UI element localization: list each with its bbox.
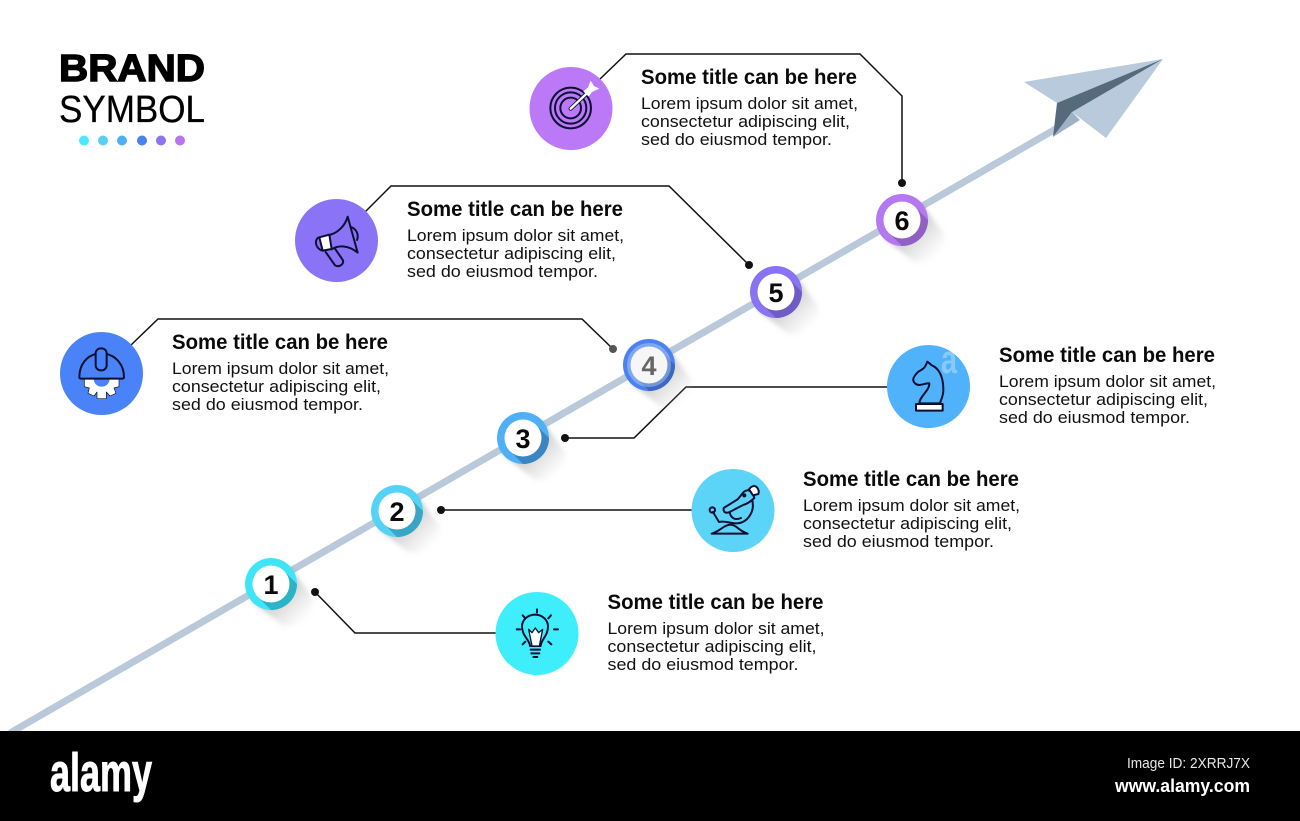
text block: step 4: consectetur adipiscing elit, (172, 378, 381, 396)
text block: step 4 (172, 331, 389, 414)
text block: step 1: Lorem ipsum dolor sit amet, (608, 620, 824, 638)
connector: step 4 (131, 319, 617, 353)
text block: step 5: sed do eiusmod tempor. (407, 263, 598, 281)
badge: number 3 (497, 412, 565, 480)
badge: number 2: 2 (389, 497, 405, 527)
text block: step 3: consectetur adipiscing elit, (999, 391, 1208, 409)
icon: chess knight (887, 338, 970, 428)
icon: paper plane (1024, 59, 1163, 138)
watermark letter: a (941, 338, 958, 382)
badge: number 4 (623, 339, 691, 407)
text block: step 1: consectetur adipiscing elit, (608, 638, 816, 656)
text block: step 5: consectetur adipiscing elit, (407, 245, 616, 263)
text block: step 6: sed do eiusmod tempor. (641, 131, 832, 149)
badge: number 5: 5 (768, 278, 784, 308)
badge: number 6 (876, 194, 944, 262)
text block: step 1: Some title can be here (608, 591, 824, 614)
icon: microscope (692, 469, 774, 552)
text block: step 1: sed do eiusmod tempor. (608, 656, 798, 674)
text block: step 2: consectetur adipiscing elit, (803, 515, 1012, 533)
badge: number 1: 1 (263, 570, 279, 600)
arrow: diagonal flight path (10, 123, 1066, 733)
text block: step 2: Some title can be here (803, 468, 1019, 491)
connector: step 3 (561, 387, 888, 442)
watermark footer bar: Image ID: 2XRRJ7X (1127, 756, 1250, 772)
watermark footer bar: www.alamy.com (1114, 776, 1250, 796)
logo: brand symbol: BRAND (59, 48, 205, 90)
connector: step 2 (437, 506, 692, 514)
badge: number 2 (371, 485, 439, 553)
text block: step 2: Lorem ipsum dolor sit amet, (803, 497, 1020, 515)
text block: step 6 (641, 66, 858, 149)
text block: step 3 (999, 344, 1216, 427)
icon: megaphone (295, 199, 378, 282)
watermark footer bar: alamy (50, 743, 152, 803)
text block: step 6: Some title can be here (641, 66, 857, 89)
text block: step 2: sed do eiusmod tempor. (803, 533, 994, 551)
text block: step 4: Lorem ipsum dolor sit amet, (172, 360, 389, 378)
text block: step 3: Lorem ipsum dolor sit amet, (999, 373, 1216, 391)
connector: step 5 (365, 186, 753, 269)
text block: step 2 (803, 468, 1020, 551)
badge: number 1 (245, 558, 313, 626)
text block: step 5: Lorem ipsum dolor sit amet, (407, 227, 624, 245)
text block: step 5 (407, 198, 624, 281)
text block: step 5: Some title can be here (407, 198, 623, 221)
badge: number 5 (750, 266, 818, 334)
icon: target with dart (530, 67, 612, 150)
connector: step 1 (311, 588, 497, 633)
watermark footer bar (0, 731, 1300, 821)
text block: step 3: Some title can be here (999, 344, 1215, 367)
text block: step 3: sed do eiusmod tempor. (999, 409, 1190, 427)
logo: brand symbol (59, 48, 205, 146)
text block: step 1 (608, 591, 824, 674)
badge: number 4: 4 (641, 351, 657, 381)
icon: light bulb (496, 592, 578, 675)
badge: number 6: 6 (894, 206, 910, 236)
text block: step 4: Some title can be here (172, 331, 388, 354)
badge: number 3: 3 (515, 424, 531, 454)
logo: brand symbol: SYMBOL (59, 89, 205, 131)
icon: helmet with gear (60, 332, 143, 415)
text block: step 6: Lorem ipsum dolor sit amet, (641, 95, 858, 113)
connector: step 6 (600, 54, 906, 187)
text block: step 6: consectetur adipiscing elit, (641, 113, 850, 131)
text block: step 4: sed do eiusmod tempor. (172, 396, 363, 414)
